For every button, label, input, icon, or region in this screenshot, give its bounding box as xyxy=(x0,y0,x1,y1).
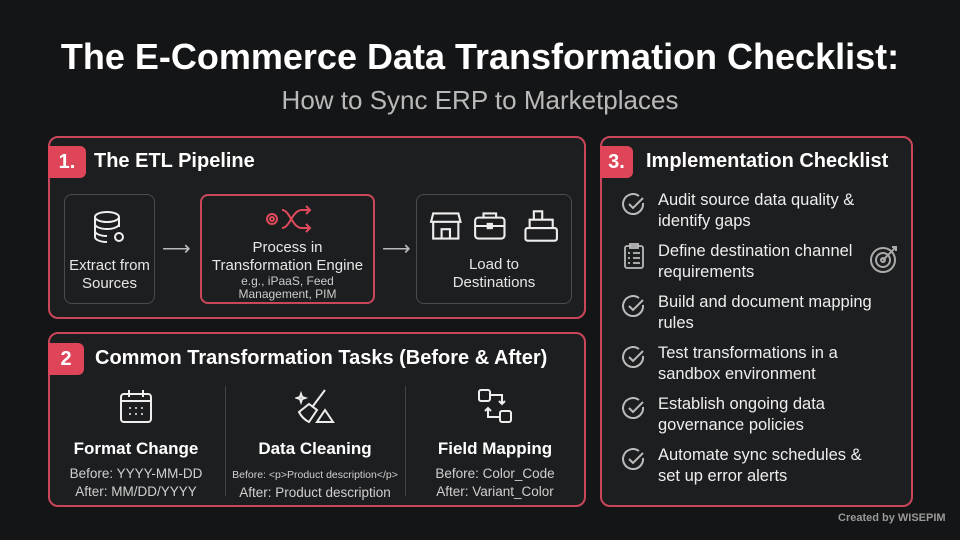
title: The E-Commerce Data Transformation Checklist: xyxy=(61,36,899,77)
badge 3 xyxy=(600,146,633,178)
item 1 xyxy=(622,191,854,230)
badge 1 xyxy=(48,146,86,178)
heading: Common Transformation Tasks (Before & After) xyxy=(95,347,547,369)
panel: ETL pipeline xyxy=(48,136,586,319)
box: load: Destinations xyxy=(453,274,535,291)
box: process: Process in xyxy=(252,239,323,256)
panel: implementation checklist xyxy=(600,136,913,507)
item 3: rules xyxy=(658,314,694,332)
column: field mapping: After: Variant_Color xyxy=(436,484,554,499)
column: data cleaning: After: Product description xyxy=(239,485,391,500)
item 1: identify gaps xyxy=(658,212,751,230)
column: format change xyxy=(70,390,202,499)
item 2: Define destination channel xyxy=(658,242,852,260)
icon: database xyxy=(94,211,124,243)
icon: calendar xyxy=(120,390,152,423)
badge 1: 1. xyxy=(59,150,75,172)
box: extract xyxy=(64,194,155,304)
column: data cleaning xyxy=(232,389,398,500)
item 6: Automate sync schedules & xyxy=(658,446,862,464)
box: load xyxy=(416,194,572,304)
heading: Implementation Checklist xyxy=(646,150,888,172)
box: extract: Sources xyxy=(82,275,137,292)
column: field mapping: Before: Color_Code xyxy=(435,466,555,481)
box: extract: Extract from xyxy=(69,257,150,274)
box: process: Management, PIM xyxy=(238,287,337,301)
item 2 xyxy=(624,242,897,281)
box: process xyxy=(200,194,375,304)
box: load: Load to xyxy=(469,256,519,273)
item 4: sandbox environment xyxy=(658,365,816,383)
heading: The ETL Pipeline xyxy=(94,150,255,172)
badge 2: 2 xyxy=(60,348,72,370)
icon: gear shuffle xyxy=(266,205,312,233)
badge 2 xyxy=(48,343,84,375)
box: process: e.g., iPaaS, Feed xyxy=(241,274,334,288)
column: format change: Format Change xyxy=(74,439,198,458)
item 6 xyxy=(622,446,862,485)
column: field mapping: Field Mapping xyxy=(438,439,552,458)
item 4: Test transformations in a xyxy=(658,344,838,362)
column: format change: After: MM/DD/YYYY xyxy=(75,484,197,499)
item 3 xyxy=(622,293,872,332)
item 6: set up error alerts xyxy=(658,467,787,485)
column: data cleaning: Before: <p>Product description</p> xyxy=(232,469,398,481)
footer credit: Created by WISEPIM xyxy=(838,512,946,524)
subtitle: How to Sync ERP to Marketplaces xyxy=(282,85,678,115)
panel: transformation tasks xyxy=(48,332,586,507)
item 4 xyxy=(622,344,838,383)
icon: broom xyxy=(295,389,335,424)
item 3: Build and document mapping xyxy=(658,293,872,311)
column: field mapping xyxy=(435,389,555,499)
item 1: Audit source data quality & xyxy=(658,191,854,209)
badge 3: 3. xyxy=(608,150,625,172)
icon: mapping xyxy=(478,389,512,423)
item 5: Establish ongoing data xyxy=(658,395,825,413)
column: data cleaning: Data Cleaning xyxy=(258,439,372,458)
column: format change: Before: YYYY-MM-DD xyxy=(70,466,202,481)
item 5 xyxy=(622,395,825,434)
item 2: requirements xyxy=(658,263,754,281)
icons: store, briefcase, register xyxy=(430,210,558,242)
checklist items xyxy=(622,191,897,485)
box: process: Transformation Engine xyxy=(212,257,363,274)
arrow: ⟶ xyxy=(162,238,191,260)
item 5: governance policies xyxy=(658,416,804,434)
arrow: ⟶ xyxy=(382,238,411,260)
